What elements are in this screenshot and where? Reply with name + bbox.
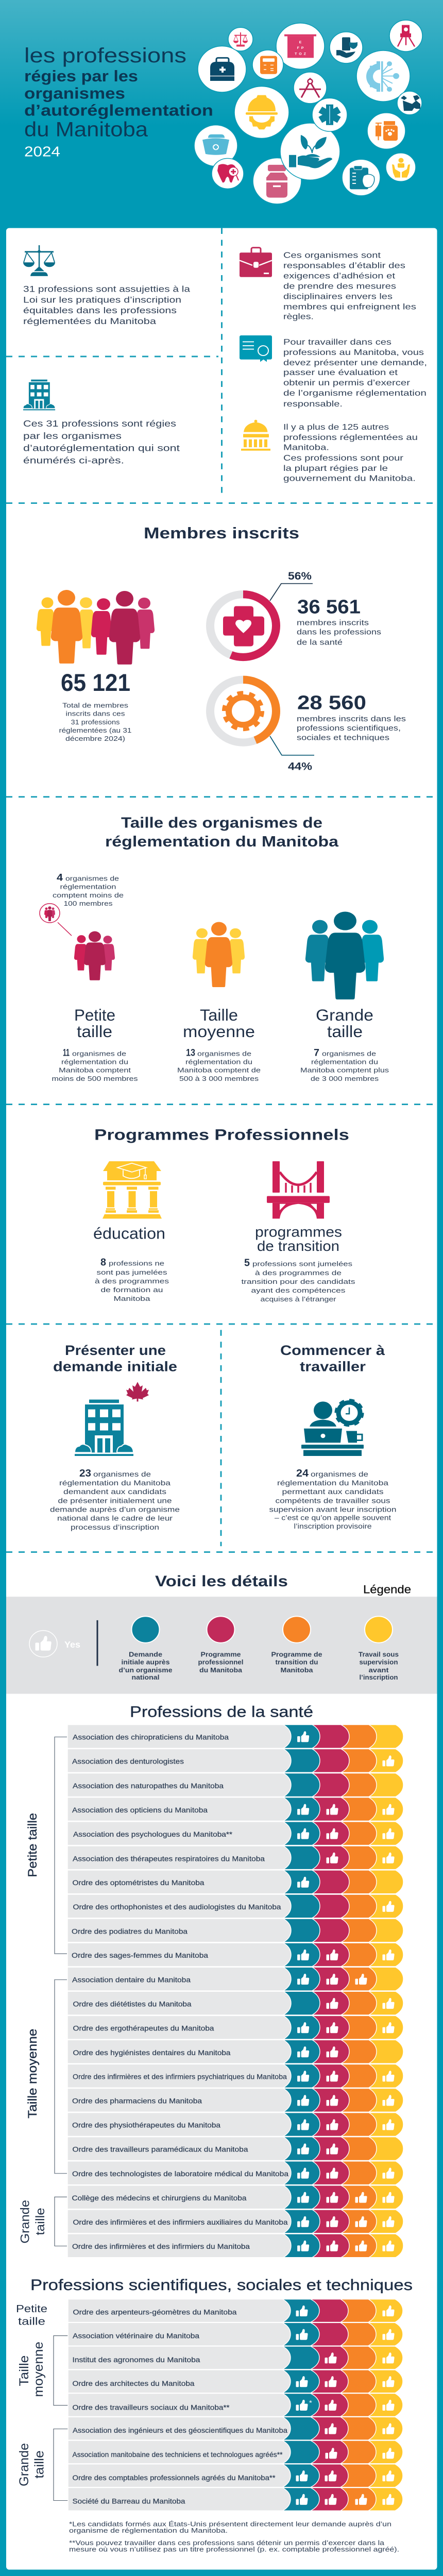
text block: 23 organismes: 23: [79, 1467, 91, 1479]
text block: 23 organismes: organismes de: [93, 1470, 151, 1478]
text block: pour travailler: professions au Manitoba, vous: [283, 348, 424, 357]
label: programmes de transition: programmes: [255, 1224, 342, 1240]
text block: responsabilités: Ces organismes sont: [283, 251, 381, 260]
text block: 8 professions: sont pas jumelées: [97, 1268, 167, 1276]
label: taille moyenne: Taille: [200, 1006, 238, 1024]
text block: 24 organismes: compétents de travailler sous: [275, 1497, 390, 1504]
legend item: demande initiale: national: [132, 1673, 160, 1681]
bracket: taille moyenne: [25, 1980, 67, 2174]
icon: eye chart: F P: [297, 46, 304, 50]
icon: bridge: [267, 1161, 330, 1218]
text block: grande taille: Manitoba comptent plus: [300, 1066, 389, 1074]
row: dentaire: [67, 1967, 403, 1991]
row: physiothérapeutes: Ordre des physiothérapeutes du Manitoba: [72, 2121, 220, 2129]
bracket: grande taille: Grande: [18, 2200, 32, 2244]
stat: 36 561: membres inscrits: [297, 619, 369, 627]
donut chart: 44% scientifiques: [210, 680, 276, 742]
heading: commencer à travailler: Commencer à: [280, 1343, 385, 1358]
row: thérapeutes respiratoires: Association des thérapeutes respiratoires du Manitoba: [73, 1855, 265, 1862]
callout: 56%: 56%: [288, 570, 312, 582]
text block: responsabilités: exigences d’adhésion et: [283, 272, 396, 281]
text block: autres professions: professions réglementées au: [283, 433, 418, 442]
text block: 5 professions: transition pour des candidats: [241, 1278, 355, 1285]
icon: medical bag: [198, 46, 246, 92]
row: hygiénistes: [67, 2040, 403, 2063]
row: optométristes: Ordre des optométristes du Manitoba: [72, 1878, 205, 1887]
row: dentaire: Association dentaire du Manitoba: [72, 1976, 191, 1984]
bracket: grande taille: Grande: [17, 2443, 31, 2486]
bracket: taille moyenne: [17, 2336, 68, 2405]
callout: 4 organismes: comptent moins de: [53, 891, 124, 899]
stat: 28 560: [297, 692, 406, 742]
text block: pour travailler: de l’organisme réglementation: [283, 388, 427, 398]
text block: autres professions: Il y a plus de 125 autres: [283, 422, 389, 432]
text block: taille moyenne: 13: [186, 1047, 195, 1058]
row: optométristes: [67, 1870, 403, 1894]
row: diététistes: [67, 1991, 403, 2015]
text block: 23 organismes: processus d’inscription: [71, 1523, 159, 1531]
text block: grande taille: [300, 1047, 389, 1082]
text block: taille moyenne: réglementation du: [185, 1058, 252, 1065]
text block: responsabilités: responsables d’établir des: [283, 261, 405, 270]
text block: 5 professions: ayant des compétences: [251, 1286, 346, 1294]
text block: 8 professions: de formation au: [101, 1286, 163, 1294]
row: infirmières auxiliaires: [67, 2210, 403, 2233]
text block: 31 professions: réglementées du Manitoba: [23, 317, 157, 326]
legend item: demande initiale: initiale auprès: [122, 1658, 170, 1666]
icon: worker at laptop: [301, 1400, 364, 1456]
text block: 8 professions: [95, 1257, 169, 1302]
row: travailleurs sociaux: *: [309, 2399, 312, 2407]
icon: building: [23, 380, 55, 410]
icon: tooth: [212, 158, 244, 189]
text block: 24 organismes: supervision avant leur inscription: [269, 1505, 396, 1513]
footnotes: organisme de réglementation du Manitoba.: [69, 2527, 228, 2534]
legend item: programme de transition: [271, 1616, 322, 1674]
text block: responsabilités: [283, 251, 416, 321]
text block: 23 organismes: demandent aux candidats: [63, 1488, 166, 1496]
icon: boot: [397, 91, 422, 115]
callout: 44%: [270, 736, 314, 772]
row: arpenteurs-géomètres: [68, 2299, 403, 2322]
row: ergothérapeutes: [67, 2015, 403, 2039]
text block: pour travailler: passer une évaluation et: [283, 368, 398, 377]
text block: total caption: Total de membres: [62, 702, 129, 709]
row: travailleurs paramédicaux: [67, 2137, 403, 2160]
heading: taille des organismes: Taille des organismes de: [121, 815, 322, 832]
icon: eye chart: [276, 23, 325, 69]
legend item: travail sous supervision: avant: [369, 1666, 389, 1674]
bracket: petite taille: [25, 1737, 67, 1954]
text block: 24 organismes: 24: [296, 1467, 309, 1479]
legend item: travail sous supervision: supervision: [360, 1658, 398, 1666]
text block: total caption: 31 professions: [71, 718, 120, 726]
text block: 8 professions: Manitoba: [114, 1295, 150, 1302]
text block: 5 professions: professions sont jumelées: [252, 1260, 352, 1268]
row: naturopathes: Association des naturopathes du Manitoba: [73, 1782, 224, 1790]
icon: large group: [305, 911, 384, 999]
text block: 8 professions: professions ne: [109, 1260, 164, 1267]
legend item: programme de transition: Manitoba: [280, 1666, 313, 1674]
text block: petite taille: moins de 500 membres: [52, 1075, 138, 1082]
stat: 36 561: 36 561: [297, 597, 361, 618]
text block: 31 professions: [23, 284, 191, 326]
icon: thumb yes: Yes: [64, 1640, 80, 1650]
heading: présenter une demande initiale: demande initiale: [53, 1359, 177, 1374]
bracket: taille moyenne: moyenne: [31, 2342, 46, 2397]
text block: 31 professions: 31 professions sont assujetties à la: [23, 284, 191, 294]
row: arpenteurs-géomètres: Ordre des arpenteurs-géomètres du Manitoba: [73, 2308, 237, 2316]
text block: 24 organismes: – c’est ce qu’on appelle souvent: [275, 1514, 391, 1522]
heading: commencer à travailler: travailler: [300, 1359, 366, 1374]
legend item: programme professionnel: du Manitoba: [199, 1666, 243, 1674]
header banner: [0, 0, 443, 229]
text block: 24 organismes: l’inscription provisoire: [294, 1522, 372, 1530]
icon: medium group: [193, 922, 245, 987]
heading: professions scientifiques: Professions scientifiques, sociales et techniques: [30, 2277, 413, 2294]
text block: 23 organismes: réglementation du Manitoba: [59, 1479, 171, 1487]
heading: présenter une demande initiale: Présenter une: [65, 1343, 166, 1358]
callout: 4 organismes: [53, 872, 124, 907]
text block: 5 professions: acquises à l’étranger: [260, 1295, 336, 1303]
panel: présenter une demande initiale: [50, 1343, 180, 1531]
row: psychologues: Association des psychologues du Manitoba**: [73, 1830, 233, 1838]
donut chart: 56% santé: [210, 595, 276, 657]
row: pharmaciens: Ordre des pharmaciens du Manitoba: [72, 2097, 202, 2105]
text block: taille moyenne: Manitoba comptent de: [177, 1066, 261, 1074]
icon: jar: [253, 158, 301, 204]
legend item: programme de transition: transition du: [275, 1658, 318, 1666]
row: vétérinaire: Association vétérinaire du Manitoba: [73, 2332, 199, 2340]
callout: 4 organismes: 4: [57, 872, 63, 883]
panel: taille des organismes: [40, 815, 389, 1082]
icon: veterinary: [367, 113, 405, 149]
row: pharmaciens: [67, 2089, 403, 2112]
panel: legend: [6, 1597, 437, 1694]
callout: 56%: [270, 570, 313, 601]
row: barreau: Société du Barreau du Manitoba: [72, 2497, 185, 2505]
text block: grande taille: réglementation du: [311, 1058, 378, 1065]
bracket: taille moyenne: Taille: [17, 2355, 31, 2386]
row: comptables: [68, 2464, 403, 2487]
row: agronomes: [68, 2346, 403, 2369]
label: grande taille: Grande: [316, 1006, 373, 1024]
text block: petite taille: organismes de: [72, 1050, 126, 1057]
row: orthophonistes: Ordre des orthophonistes et des audiologistes du Manitoba: [73, 1903, 281, 1911]
text block: autres professions: la plupart régies par le: [283, 464, 388, 473]
title: d’autoréglementation: [24, 101, 213, 119]
heading: professions de la santé: Professions de la santé: [130, 1704, 313, 1720]
icon: gear and circuit: [356, 50, 410, 101]
text block: 5 professions: [241, 1257, 355, 1303]
icon: eye chart: T O Z: [295, 53, 306, 56]
row: opticiens: Association des opticiens du Manitoba: [72, 1806, 208, 1814]
heading: légende: Légende: [363, 1583, 411, 1596]
label: petite taille: [16, 2303, 47, 2328]
row: technologistes de laboratoire: Ordre des technologistes de laboratoire médical du Manitoba: [72, 2170, 288, 2178]
text block: 5 professions: à des programmes de: [255, 1269, 342, 1277]
bracket: grande taille: [17, 2429, 68, 2500]
text block: taille moyenne: 500 à 3 000 membres: [179, 1075, 259, 1082]
icon: small group: [74, 931, 115, 980]
text block: 24 organismes: réglementation du Manitoba: [277, 1479, 388, 1487]
label: petite taille: [74, 1006, 115, 1041]
row: travailleurs sociaux: Ordre des travailleurs sociaux du Manitoba**: [72, 2403, 230, 2411]
text block: pour travailler: obtenir un permis d’exercer: [283, 378, 411, 387]
label: grande taille: [316, 1006, 373, 1041]
row: naturopathes: [67, 1773, 403, 1797]
icon: calculator: [252, 50, 283, 79]
text block: responsabilités: règles.: [283, 312, 314, 321]
row: travailleurs paramédicaux: Ordre des travailleurs paramédicaux du Manitoba: [72, 2145, 248, 2154]
row: médecins et chirurgiens: Collège des médecins et chirurgiens du Manitoba: [72, 2194, 247, 2202]
text block: responsabilités: disciplinaires envers les: [283, 292, 393, 301]
title: 2024: [24, 143, 60, 159]
row: techniciens et technologues: [68, 2441, 403, 2464]
text block: pour travailler: devez présenter une demande,: [283, 358, 427, 367]
footnotes: [69, 2520, 399, 2553]
callout: 4 organismes: 100 membres: [63, 900, 113, 907]
icon: hand and puzzle: [330, 32, 363, 63]
icon: loupe mini group: [40, 904, 72, 936]
label: petite taille: taille: [77, 1023, 112, 1041]
heading: taille des organismes: réglementation du Manitoba: [105, 834, 339, 850]
label: grande taille: taille: [327, 1023, 363, 1041]
text block: 24 organismes: organismes de: [311, 1470, 368, 1478]
icon: eye chart: E: [299, 41, 302, 44]
text block: 31 professions: équitables dans les professions: [23, 306, 177, 315]
callout: 44%: 44%: [288, 760, 312, 772]
text block: 23 organismes: de présenter initialement une: [58, 1497, 172, 1504]
heading: membres inscrits: Membres inscrits: [144, 524, 299, 542]
title: régies par les: [24, 67, 138, 85]
row: denturologistes: Association des denturologistes: [72, 1757, 184, 1766]
text block: pour travailler: Pour travailler dans ces: [283, 337, 391, 347]
text block: 31 professions: Loi sur les pratiques d’inscription: [23, 295, 181, 304]
legend item: programme professionnel: professionnel: [198, 1658, 244, 1666]
text block: 23 organismes: [50, 1467, 180, 1531]
text block: responsabilités: de prendre des mesures: [283, 282, 396, 291]
label: taille moyenne: [183, 1006, 255, 1041]
legend item: programme professionnel: Programme: [200, 1651, 241, 1658]
row: psychologues: [67, 1822, 403, 1845]
text block: autres professions: [283, 422, 418, 483]
legend item: demande initiale: d’un organisme: [118, 1666, 173, 1674]
text block: petite taille: réglementation du: [61, 1058, 128, 1065]
row: chiropraticiens: Association des chiropraticiens du Manitoba: [73, 1733, 229, 1741]
row: infirmières: Ordre des infirmières et des infirmiers du Manitoba: [72, 2242, 250, 2250]
row: infirmières: [67, 2234, 403, 2258]
text block: responsabilités: membres qui enfreignent les: [283, 302, 416, 312]
row: barreau: [68, 2488, 403, 2511]
label: programmes de transition: de transition: [257, 1238, 339, 1254]
heading: commencer à travailler: [280, 1343, 385, 1374]
bracket: taille moyenne: Taille moyenne: [25, 2029, 39, 2119]
title: organismes: [24, 84, 125, 102]
icon: nurse cap: [194, 125, 237, 166]
row: opticiens: [67, 1798, 403, 1821]
heading: taille des organismes: [105, 815, 339, 850]
row: vétérinaire: [68, 2323, 403, 2346]
table: professions de la santé: [18, 1725, 403, 2258]
text block: 5 professions: 5: [244, 1257, 250, 1269]
row: ingénieurs et géoscientifiques: Association des ingénieurs et des géoscientifiques du Manitoba: [73, 2427, 287, 2434]
legend item: programme de transition: Programme de: [271, 1651, 322, 1658]
legend item: demande initiale: [118, 1616, 172, 1681]
icon: group of people: [37, 590, 155, 665]
text block: total caption: réglementées (au 31: [59, 726, 132, 734]
text block: total caption: [59, 702, 132, 742]
row: sages-femmes: Ordre des sages-femmes du Manitoba: [72, 1952, 208, 1959]
row: chiropraticiens: [67, 1725, 403, 1748]
stat: 28 560: sociales et techniques: [297, 734, 390, 742]
row: travailleurs sociaux: [68, 2394, 403, 2416]
row: infirmières psychiatriques: [67, 2064, 403, 2088]
heading: voici les détails: Voici les détails: [155, 1573, 288, 1590]
icon: certificate: [240, 335, 272, 362]
text block: 23 organismes: national dans le cadre de leur: [57, 1514, 173, 1522]
row: agronomes: Institut des agronomes du Manitoba: [72, 2355, 200, 2364]
row: ingénieurs et géoscientifiques: [68, 2417, 403, 2440]
row: ergothérapeutes: Ordre des ergothérapeutes du Manitoba: [73, 2024, 214, 2032]
text block: 24 organismes: [269, 1467, 397, 1530]
stat: total 65 121: 65 121: [61, 669, 130, 697]
text block: petite taille: Manitoba comptent: [59, 1066, 131, 1074]
stat: 36 561: dans les professions: [297, 628, 382, 637]
stat: 36 561: de la santé: [297, 638, 343, 647]
label: programmes de transition: [255, 1224, 342, 1254]
legend item: travail sous supervision: Travail sous: [359, 1651, 399, 1658]
row: physiothérapeutes: [67, 2113, 403, 2136]
label: éducation: éducation: [93, 1225, 165, 1242]
text block: grande taille: organismes de: [322, 1050, 376, 1057]
legend item: travail sous supervision: l’inscription: [360, 1673, 398, 1681]
text block: taille moyenne: [177, 1047, 261, 1082]
text block: petite taille: 11: [63, 1047, 70, 1058]
text block: pour travailler: [283, 337, 427, 409]
icon: balance scales: [23, 245, 55, 276]
text block: 8 professions: 8: [100, 1257, 106, 1268]
text block: total caption: décembre 2024): [65, 735, 125, 742]
panel: membres inscrits: [37, 524, 406, 772]
text block: ces 31 professions: [23, 418, 180, 465]
row: denturologistes: [67, 1749, 403, 1772]
row: diététistes: Ordre des diététistes du Manitoba: [73, 2000, 192, 2008]
stat: 36 561: [297, 597, 382, 647]
bracket: grande taille: taille: [33, 2208, 47, 2235]
icon: thumb yes: [29, 1631, 80, 1657]
bracket: grande taille: [18, 2197, 67, 2246]
text block: grande taille: de 3 000 membres: [311, 1075, 379, 1082]
text block: petite taille: [52, 1047, 138, 1082]
row: podiatres: Ordre des podiatres du Manitoba: [72, 1927, 188, 1936]
text block: autres professions: gouvernement du Manitoba.: [283, 474, 416, 483]
text block: ces 31 professions: Ces 31 professions sont régies: [23, 418, 176, 429]
title: [24, 44, 213, 159]
row: hygiénistes: Ordre des hygiénistes dentaires du Manitoba: [73, 2048, 231, 2057]
text block: ces 31 professions: d’autoréglementation qui sont: [23, 443, 180, 453]
row: techniciens et technologues: Association manitobaine des techniciens et technologues agréés**: [72, 2450, 283, 2459]
icon: large building: [75, 1400, 133, 1456]
stat: 28 560: membres inscrits dans les: [297, 715, 406, 723]
row: technologistes de laboratoire: [67, 2161, 403, 2185]
text block: 24 organismes: permettant aux candidats: [282, 1488, 383, 1496]
legend item: programme professionnel: [198, 1616, 243, 1674]
callout: 4 organismes: organismes de: [65, 875, 119, 882]
footnotes: **Vous pouvez travailler dans ces professions sans détenir un permis d’exercer dans la: [69, 2539, 384, 2547]
heading: programmes professionnels: Programmes Professionnels: [94, 1127, 349, 1143]
icon: star of life: [312, 98, 347, 131]
icon: capitol: [241, 420, 270, 451]
icon: maple leaf: [126, 1382, 149, 1401]
text block: autres professions: Manitoba.: [283, 443, 329, 452]
icon cluster: professions: [194, 20, 422, 204]
row: infirmières psychiatriques: Ordre des infirmières et des infirmiers psychiatriques du Manitoba: [73, 2073, 287, 2081]
heading: présenter une demande initiale: [53, 1343, 177, 1374]
icon: drafting compass: [294, 72, 327, 104]
text block: ces 31 professions: par les organismes: [23, 431, 122, 441]
legend item: travail sous supervision: [359, 1616, 399, 1681]
icon: surveyor tripod: [389, 20, 422, 52]
text block: pour travailler: responsable.: [283, 399, 343, 409]
icon: hand and plant: [280, 123, 340, 180]
table: professions scientifiques, sociales et techniques: [16, 2299, 403, 2511]
text block: taille moyenne: organismes de: [197, 1050, 251, 1057]
title: les professions: [24, 44, 186, 67]
icon: caring hands: [386, 153, 416, 181]
panel: rôle des organismes (droite): [240, 248, 427, 483]
row: orthophonistes: [67, 1894, 403, 1918]
label: petite taille: taille: [18, 2316, 45, 2328]
label: petite taille: Petite: [16, 2303, 47, 2315]
stat: 28 560: professions scientifiques,: [297, 724, 401, 733]
panel: loi et organismes (gauche): [23, 245, 191, 465]
row: comptables: Ordre des comptables professionnels agréés du Manitoba**: [72, 2473, 276, 2482]
stat: 28 560: 28 560: [297, 692, 366, 714]
row: architectes: [68, 2370, 403, 2393]
icon: education temple: [103, 1161, 162, 1218]
text block: 8 professions: à des programmes: [95, 1277, 169, 1285]
text block: grande taille: 7: [314, 1047, 319, 1058]
legend item: demande initiale: Demande: [129, 1651, 162, 1658]
row: architectes: Ordre des architectes du Manitoba: [72, 2379, 195, 2387]
row: sages-femmes: [67, 1943, 403, 1967]
panel: commencer à travailler: [269, 1343, 397, 1530]
label: taille moyenne: moyenne: [183, 1023, 255, 1041]
text block: autres professions: Ces professions sont pour: [283, 453, 404, 463]
text block: total caption: inscrits dans ces: [65, 710, 125, 718]
footnotes: mesure où vous n’utilisez pas un titre professionnel (p. ex. comptable professionnel agréé).: [69, 2546, 399, 2553]
bracket: petite taille: Petite taille: [25, 1813, 39, 1877]
row: infirmières auxiliaires: Ordre des infirmières et des infirmiers auxiliaires du Manitoba: [73, 2218, 288, 2226]
icon: hard hat and gear: [234, 87, 289, 138]
callout: 4 organismes: réglementation: [60, 883, 116, 891]
text block: ces 31 professions: énumérés ci-après.: [23, 455, 124, 465]
row: podiatres: [67, 1919, 403, 1942]
row: médecins et chirurgiens: [67, 2185, 403, 2209]
text block: 23 organismes: demande auprès d’un organisme: [50, 1505, 180, 1513]
panel: programmes professionnels: [93, 1127, 355, 1303]
footnotes: *Les candidats formés aux États-Unis présentent directement leur demande auprès d’un: [69, 2520, 391, 2528]
icon: briefcase: [240, 248, 272, 277]
title: du Manitoba: [24, 118, 148, 141]
row: thérapeutes respiratoires: [67, 1846, 403, 1870]
icon: clipboard and apple: [342, 159, 380, 196]
bracket: grande taille: taille: [32, 2450, 47, 2479]
label: petite taille: Petite: [74, 1006, 115, 1024]
icon: scales small: [228, 27, 253, 51]
